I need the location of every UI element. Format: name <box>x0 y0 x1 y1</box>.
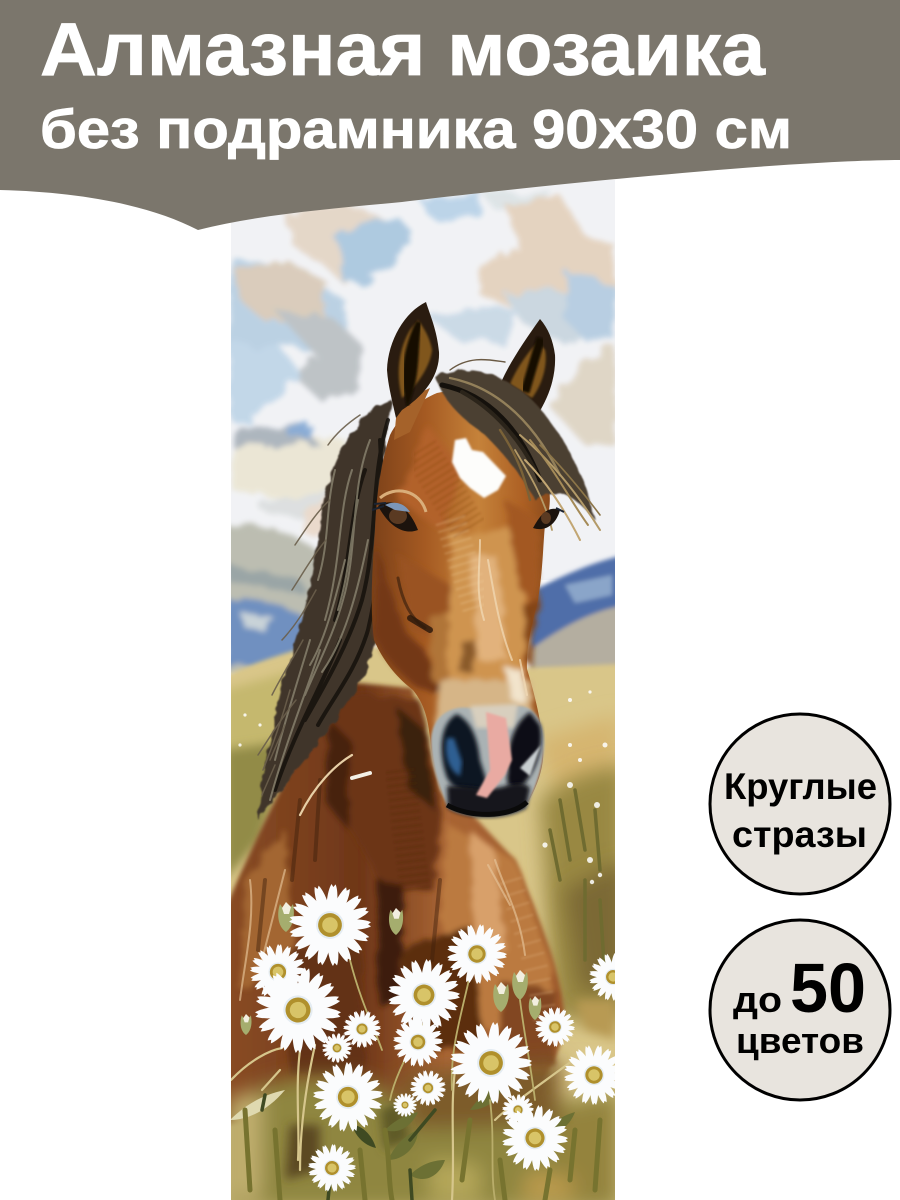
daisy 10 <box>446 1018 536 1108</box>
daisy 9 <box>535 1007 575 1047</box>
body brush strokes <box>406 877 556 1022</box>
daisy 16 <box>497 1100 573 1176</box>
daisy 2 <box>447 924 507 984</box>
daisy 8 <box>393 1018 443 1067</box>
daisy 5 <box>388 959 460 1028</box>
face lines <box>398 540 527 695</box>
white star <box>452 438 506 498</box>
painting: horse in a daisy meadow <box>225 180 640 1200</box>
meadow <box>225 640 625 1200</box>
mane <box>258 400 392 820</box>
daisy flowers <box>247 881 640 1194</box>
muzzle <box>431 704 544 817</box>
daisy 6 <box>342 1009 382 1049</box>
forelock <box>436 360 600 540</box>
daisy 11 <box>559 1040 629 1110</box>
pink nose <box>476 712 512 798</box>
grass blade on neck <box>300 755 370 815</box>
watercolor clouds <box>231 190 615 540</box>
left hills <box>231 520 316 675</box>
left ear <box>387 302 439 440</box>
sky <box>231 180 615 580</box>
right hills <box>530 556 620 672</box>
daisy 12 <box>312 1061 384 1133</box>
title: Алмазная мозаика <box>40 7 766 91</box>
badge: up to 50 colours: 50 <box>790 949 866 1027</box>
daisy 13 <box>406 1066 450 1110</box>
leaves <box>231 1090 575 1179</box>
face shading <box>374 425 540 730</box>
left eye <box>372 491 426 532</box>
title <box>40 7 792 160</box>
meadow dots <box>238 690 608 884</box>
daisy 4 <box>250 944 306 998</box>
right eye <box>533 508 564 529</box>
neck shading <box>240 690 555 1075</box>
daisy 1 <box>289 884 371 966</box>
badge: up to 50 colours: цветов <box>736 1020 864 1061</box>
horse body <box>225 680 564 1125</box>
lower meadow <box>225 790 620 1200</box>
badge: round rhinestones <box>710 714 890 894</box>
mouth <box>447 783 530 817</box>
flower buds <box>241 902 541 1035</box>
fur hatching <box>420 450 478 610</box>
header banner <box>0 0 900 230</box>
badge: up to 50 colours <box>710 920 890 1100</box>
daisy 14 <box>392 1092 418 1118</box>
daisy 18 <box>586 950 640 1004</box>
badge: up to 50 colours: до <box>733 979 782 1020</box>
right nostril <box>507 712 541 788</box>
daisy 15 <box>501 1093 535 1127</box>
badge: round rhinestones: Круглые <box>724 766 877 807</box>
daisy 3 <box>255 968 341 1053</box>
badge: round rhinestones: стразы <box>732 814 867 855</box>
subtitle: без подрамника 90х30 см <box>40 98 792 160</box>
daisy 7 <box>322 1033 352 1063</box>
right ear <box>500 319 555 414</box>
horse head <box>372 391 550 816</box>
daisy 17 <box>306 1142 358 1194</box>
left nostril <box>442 714 490 794</box>
